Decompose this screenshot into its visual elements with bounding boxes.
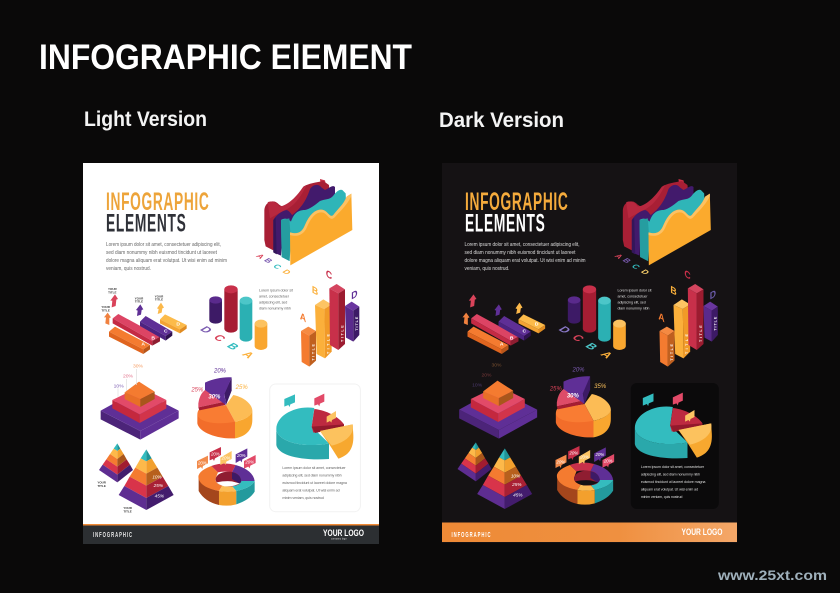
chart: cylinders: amet, consectetuer bbox=[617, 294, 648, 298]
chart: cylinders: diam nonummy nibh bbox=[259, 306, 291, 310]
chart: isometric columns: B bbox=[670, 284, 677, 299]
card: large pie bbox=[270, 384, 360, 512]
chart: stepped pyramid: 10% bbox=[114, 383, 124, 389]
chart: isometric horizontal bars: YOUR bbox=[135, 296, 144, 300]
poster footer bar bbox=[83, 524, 379, 544]
chart: cylinders: B bbox=[582, 342, 600, 352]
chart: stepped pyramid: 20% bbox=[481, 373, 492, 379]
panel: dark version poster bbox=[442, 163, 737, 543]
chart: wave area bbox=[254, 179, 352, 276]
chart: cylinders: diam nonummy nibh bbox=[617, 306, 649, 310]
chart: cylinders: Lorem ipsum dolor sit bbox=[617, 288, 651, 292]
chart: pie with lifted slice: 25% bbox=[235, 385, 248, 391]
watermark: www.25xt.com bbox=[717, 567, 827, 583]
main title: INFOGRAPHIC ElEMENT bbox=[39, 38, 412, 77]
heading: dark version: Dark Version bbox=[439, 109, 564, 132]
panel: light version poster bbox=[83, 163, 379, 544]
chart: isometric columns: A bbox=[658, 311, 665, 325]
chart: isometric horizontal bars: B bbox=[510, 335, 514, 341]
chart: stepped pyramid: 20% bbox=[123, 374, 134, 380]
chart: stepped pyramid: 10% bbox=[472, 382, 483, 388]
intro paragraph: veniam, quis nostrud. bbox=[464, 266, 510, 272]
chart: isometric columns bbox=[658, 268, 718, 367]
chart: isometric horizontal bars: YOUR bbox=[101, 305, 111, 309]
card: large pie: minim veniam, quis nostrud bbox=[282, 496, 324, 500]
chart: stepped pyramid bbox=[459, 362, 537, 439]
chart: cylinders: A bbox=[239, 350, 256, 360]
poster title: ELEMENTS bbox=[106, 210, 186, 238]
chart: small pyramids: YOUR bbox=[97, 481, 107, 485]
chart: donut with flags: 20% bbox=[236, 453, 246, 458]
chart: pie with lifted slice: 25% bbox=[190, 388, 204, 394]
chart: isometric columns: TITLE bbox=[312, 343, 316, 361]
chart: donut with flags: 20% bbox=[579, 455, 589, 460]
poster footer bar: YOUR LOGO bbox=[682, 527, 722, 537]
chart: cylinders: B bbox=[223, 342, 241, 352]
chart: donut with flags: 20% bbox=[594, 452, 604, 457]
chart: isometric columns: C bbox=[684, 268, 691, 283]
chart: cylinders: adipiscing elit, sed bbox=[617, 300, 646, 304]
chart: small pyramids: 45% bbox=[155, 494, 164, 499]
card: large pie: euismod tincidunt ut laoreet dolore magna bbox=[641, 480, 706, 484]
chart: isometric horizontal bars: YOUR bbox=[155, 294, 164, 298]
card: large pie: Lorem ipsum dolor sit amet, consectetuer bbox=[641, 465, 705, 469]
chart: small pyramids: 25% bbox=[153, 483, 163, 488]
chart: donut with flags: 20% bbox=[221, 456, 230, 461]
chart: pie with lifted slice bbox=[190, 368, 252, 438]
chart: isometric columns: TITLE bbox=[685, 333, 689, 354]
card: large pie: aliquam erat volutpat. Ut wisi enim ad bbox=[282, 489, 340, 493]
chart: small pyramids: TITLE bbox=[124, 509, 132, 513]
chart: isometric columns: TITLE bbox=[670, 343, 674, 361]
chart: isometric horizontal bars: B bbox=[151, 335, 155, 341]
poster title bbox=[106, 189, 209, 238]
chart: cylinders: C bbox=[210, 333, 228, 344]
chart: wave area: A bbox=[254, 253, 267, 260]
chart: isometric horizontal bars bbox=[101, 287, 187, 354]
intro paragraph bbox=[464, 242, 586, 272]
chart: small pyramids: 45% bbox=[513, 493, 522, 498]
chart: wave area: B bbox=[620, 257, 633, 265]
card: large pie: Lorem ipsum dolor sit amet, consectetuer bbox=[282, 466, 346, 470]
intro paragraph: Lorem ipsum dolor sit amet, consectetuer adipiscing elit, bbox=[464, 242, 580, 248]
intro paragraph: dolore magna aliquam erat volutpat. Ut wisi enim ad minim bbox=[106, 258, 227, 264]
chart: cylinders: A bbox=[597, 350, 615, 360]
chart: cylinders: D bbox=[197, 325, 214, 335]
intro paragraph bbox=[106, 242, 227, 272]
chart: isometric columns: TITLE bbox=[713, 316, 717, 331]
chart: donut with flags: 20% bbox=[555, 459, 565, 464]
chart: donut with flags: 20% bbox=[568, 451, 578, 456]
chart: donut with flags: 20% bbox=[210, 452, 220, 457]
chart: isometric horizontal bars: A bbox=[500, 342, 504, 348]
chart: isometric horizontal bars: TITLE bbox=[155, 298, 163, 302]
chart: stepped pyramid bbox=[101, 363, 179, 440]
chart: stepped pyramid: 30% bbox=[491, 362, 502, 368]
chart: donut with flags: 20% bbox=[244, 460, 254, 465]
chart: isometric horizontal bars: TITLE bbox=[135, 300, 143, 304]
chart: wave area: C bbox=[629, 263, 642, 271]
chart: pie with lifted slice: 35% bbox=[594, 384, 607, 390]
chart: pie with lifted slice: 20% bbox=[571, 367, 585, 373]
chart: donut with flags: 20% bbox=[197, 460, 207, 465]
chart: cylinders: D bbox=[555, 325, 573, 335]
chart: wave area: C bbox=[271, 263, 284, 271]
chart: pie with lifted slice: 20% bbox=[213, 368, 227, 374]
chart: isometric horizontal bars: C bbox=[164, 329, 168, 335]
chart: pie with lifted slice: 25% bbox=[549, 387, 562, 393]
heading: light version: Light Version bbox=[84, 108, 207, 131]
chart: small pyramids: 10% bbox=[511, 473, 520, 478]
intro paragraph: veniam, quis nostrud. bbox=[106, 266, 151, 272]
chart: isometric horizontal bars: YOUR bbox=[108, 287, 117, 291]
poster title: INFOGRAPHIC bbox=[465, 189, 568, 216]
chart: isometric horizontal bars: C bbox=[522, 329, 526, 335]
card: large pie: euismod tincidunt ut laoreet dolore magna bbox=[282, 481, 348, 485]
chart: cylinders bbox=[197, 285, 293, 360]
chart: isometric columns: C bbox=[326, 268, 332, 283]
chart: isometric columns: TITLE bbox=[355, 316, 359, 331]
chart: isometric horizontal bars: D bbox=[176, 322, 180, 328]
chart: pie with lifted slice bbox=[549, 367, 611, 437]
chart: isometric horizontal bars: TITLE bbox=[102, 308, 110, 312]
poster footer bar: INFOGRAPHIC bbox=[93, 532, 132, 539]
chart: isometric columns: B bbox=[312, 284, 318, 299]
chart: cylinders: Lorem ipsum dolor sit bbox=[259, 288, 293, 292]
chart: wave area: A bbox=[612, 253, 625, 260]
poster title bbox=[465, 189, 568, 238]
poster footer bar bbox=[442, 522, 737, 542]
poster footer bar: company logo bbox=[331, 538, 347, 540]
chart: small pyramids: YOUR bbox=[123, 506, 133, 510]
chart: isometric columns: TITLE bbox=[326, 333, 330, 354]
chart: cylinders bbox=[555, 285, 651, 360]
poster title: INFOGRAPHIC bbox=[106, 189, 209, 216]
chart: isometric horizontal bars bbox=[462, 294, 545, 354]
chart: isometric columns: D bbox=[710, 288, 716, 303]
chart: cylinders: adipiscing elit, sed bbox=[259, 300, 287, 304]
chart: small pyramids: TITLE bbox=[98, 484, 106, 488]
chart: wave area bbox=[612, 179, 711, 276]
chart: isometric columns bbox=[300, 268, 359, 367]
chart: stepped pyramid: 30% bbox=[133, 363, 144, 369]
intro paragraph: sed diam nonummy nibh euismod tincidunt ut laoreet bbox=[106, 250, 218, 256]
poster footer bar: INFOGRAPHIC bbox=[452, 532, 490, 539]
chart: isometric columns: TITLE bbox=[699, 325, 703, 342]
card: large pie: adipiscing elit, sed diam nonummy nibh bbox=[282, 473, 342, 477]
chart: pie with lifted slice: 30% bbox=[208, 394, 221, 400]
chart: donut with flags: 20% bbox=[603, 459, 613, 464]
chart: isometric horizontal bars: A bbox=[141, 342, 145, 348]
chart: cylinders: amet, consectetuer bbox=[259, 294, 290, 298]
card: large pie bbox=[631, 383, 719, 509]
poster footer bar: YOUR LOGO bbox=[323, 528, 364, 538]
chart: pie with lifted slice: 30% bbox=[567, 393, 579, 399]
chart: small pyramids: 10% bbox=[152, 474, 162, 479]
chart: isometric columns: A bbox=[300, 311, 306, 325]
chart: isometric horizontal bars: TITLE bbox=[108, 290, 116, 294]
chart: isometric horizontal bars: D bbox=[535, 322, 539, 328]
poster title: ELEMENTS bbox=[465, 210, 545, 238]
card: large pie: minim veniam, quis nostrud bbox=[641, 495, 682, 499]
chart: wave area: D bbox=[639, 268, 652, 276]
chart: small pyramids bbox=[457, 442, 532, 509]
intro paragraph: dolore magna aliquam erat volutpat. Ut wisi enim ad minim bbox=[464, 258, 586, 264]
chart: donut with flags bbox=[197, 447, 256, 506]
chart: wave area: B bbox=[262, 257, 275, 265]
chart: isometric columns: TITLE bbox=[340, 325, 344, 342]
card: large pie: adipiscing elit, sed diam nonummy nibh bbox=[641, 472, 700, 476]
chart: small pyramids: 25% bbox=[511, 482, 521, 487]
chart: wave area: D bbox=[280, 268, 293, 276]
chart: donut with flags bbox=[555, 446, 614, 505]
intro paragraph: sed diam nonummy nibh euismod tincidunt ut laoreet bbox=[464, 250, 576, 256]
chart: isometric columns: D bbox=[351, 288, 357, 303]
chart: small pyramids bbox=[97, 443, 174, 513]
chart: cylinders: C bbox=[569, 333, 586, 344]
intro paragraph: Lorem ipsum dolor sit amet, consectetuer adipiscing elit, bbox=[106, 242, 221, 248]
card: large pie: aliquam erat volutpat. Ut wisi enim ad bbox=[641, 488, 698, 492]
